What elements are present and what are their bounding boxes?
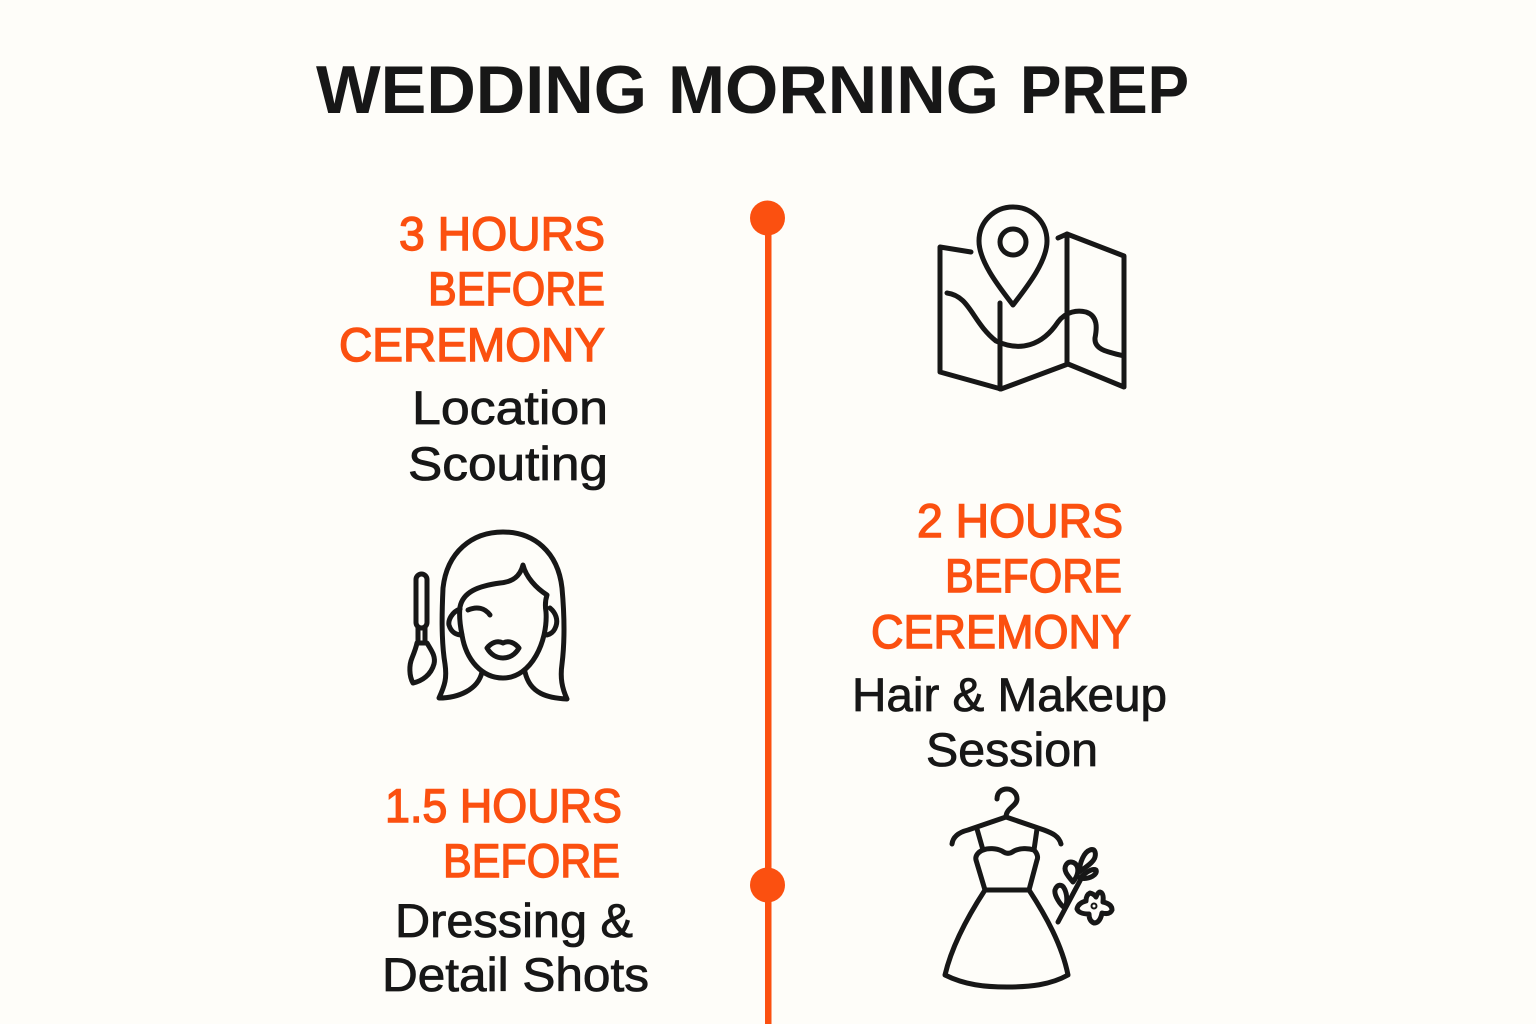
activity label: Scouting <box>408 438 608 491</box>
icon: dress on hanger with flowers <box>945 789 1112 987</box>
time label: 3 HOURS <box>399 208 605 261</box>
icon: map with location pin <box>940 207 1124 389</box>
title: MORNING <box>668 52 999 128</box>
timeline <box>750 200 785 1024</box>
time label <box>339 208 605 372</box>
step: 2 hours before ceremony <box>852 495 1167 777</box>
step: 1.5 hours before <box>382 780 649 1002</box>
time label <box>385 780 622 888</box>
timeline marker: bottom <box>750 868 785 902</box>
time label: BEFORE <box>443 835 620 888</box>
activity label: Location <box>412 382 608 435</box>
title: WEDDING <box>316 52 647 128</box>
activity label <box>852 669 1167 777</box>
time label: CEREMONY <box>339 319 605 372</box>
time label: 1.5 HOURS <box>385 780 622 833</box>
title <box>316 52 1189 128</box>
time label <box>871 495 1131 659</box>
activity label: Session <box>926 724 1098 777</box>
title: PREP <box>1020 52 1189 128</box>
time label: BEFORE <box>945 550 1122 603</box>
activity label <box>382 895 649 1002</box>
activity label <box>408 382 608 491</box>
step: 3 hours before ceremony <box>339 208 608 491</box>
timeline marker: top <box>750 200 785 236</box>
activity label: Detail Shots <box>382 949 649 1002</box>
icon: face with makeup brush <box>410 532 567 699</box>
time label: 2 HOURS <box>917 495 1123 548</box>
activity label: Hair & Makeup <box>852 669 1167 722</box>
activity label: Dressing & <box>395 895 633 948</box>
time label: CEREMONY <box>871 606 1131 659</box>
time label: BEFORE <box>428 263 605 316</box>
